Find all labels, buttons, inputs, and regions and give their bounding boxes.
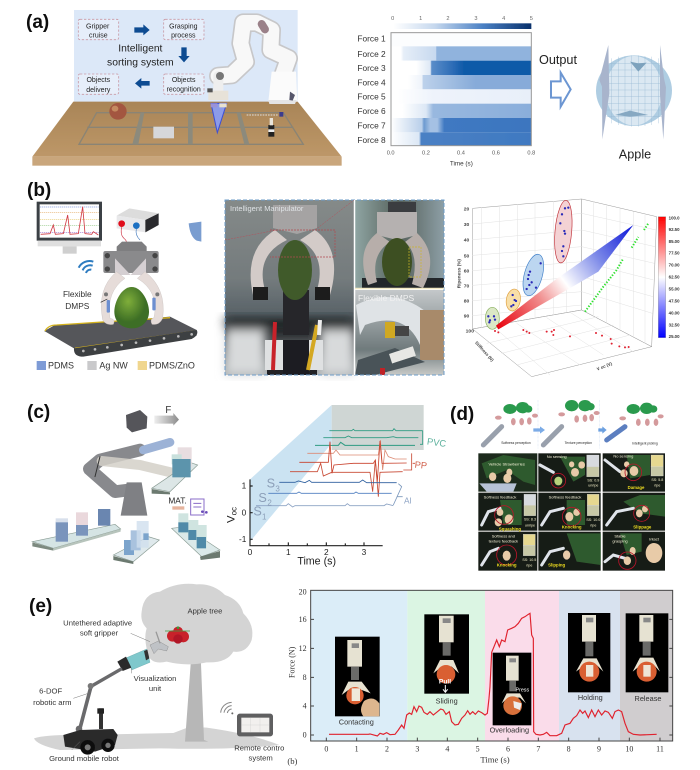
colour bar: 85.00: [669, 239, 680, 244]
S labels: S: [253, 505, 262, 519]
axes: [250, 479, 383, 546]
axis labels: 0: [248, 547, 253, 557]
material legend: [37, 361, 195, 371]
colour bar: 92.50: [669, 227, 680, 232]
time axis: 0.8: [527, 150, 535, 156]
time axis: [387, 150, 535, 167]
labels: Ground mobile robot: [49, 754, 120, 763]
axis numbers: 1: [355, 745, 359, 754]
illustration: intelligent sorting system: Objects: [172, 77, 196, 84]
axis labels: 70: [464, 283, 470, 289]
top strip: strawberry perception: [483, 400, 664, 448]
conveyor right: [172, 513, 220, 560]
mobile robot: [63, 708, 118, 755]
phase labels: Contacting: [339, 718, 374, 727]
conveyor top right: [152, 447, 198, 494]
voltage waterfall chart: [226, 405, 447, 567]
force labels: Force 8: [357, 135, 386, 145]
S labels: S: [267, 477, 275, 491]
apple on table: [109, 103, 127, 120]
labels: Visualization: [134, 674, 176, 683]
illustration: gripper on conveyor: [37, 202, 201, 371]
DMPS label: DMPS: [65, 301, 90, 311]
colour bar: 32.50: [669, 322, 680, 327]
photo captions: No sensing: [547, 454, 567, 459]
heading: (e): (e): [29, 596, 52, 617]
colour scale: 4: [502, 16, 505, 22]
labels: 6-DOF: [39, 686, 62, 695]
photo grid: SS: 5.8: [651, 478, 663, 482]
axis numbers: 2: [385, 745, 389, 754]
PVC label: PVC: [426, 436, 447, 449]
illustration: intelligent sorting system: cruise: [89, 33, 108, 40]
photo captions: grasping: [612, 538, 628, 543]
MAT label and icon: MAT.: [168, 496, 187, 506]
axis labels: -1: [239, 534, 247, 544]
photo caption: Flexible DMPS: [358, 293, 415, 303]
heading: (d): (d): [450, 404, 474, 425]
force labels: Force 2: [357, 49, 386, 59]
photo grid: ripe: [526, 564, 532, 568]
conveyor: [44, 317, 197, 357]
axis labels: 20: [464, 206, 470, 212]
colour bar: 100.0: [669, 215, 680, 220]
photo: intelligent manipulator: [225, 200, 354, 375]
robot arm: [89, 442, 175, 492]
axis numbers: 4: [445, 745, 449, 754]
axis labels: 1: [242, 481, 247, 491]
red circles: [495, 464, 650, 569]
axis labels: [226, 481, 367, 567]
axis labels: oc: [230, 507, 239, 515]
inset: sliding: Pull: [439, 678, 451, 685]
S labels: 2: [267, 499, 272, 508]
time axis: 0.2: [422, 150, 430, 156]
photo captions: Softness feedback: [549, 494, 581, 499]
axis numbers: 20: [299, 587, 307, 596]
colour bar: 40.00: [669, 310, 680, 315]
photo captions: Softness and: [492, 534, 515, 539]
force labels: [357, 34, 386, 145]
AI label: Al: [404, 496, 412, 506]
axis numbers: 8: [303, 673, 307, 682]
colour bar: 77.50: [669, 251, 680, 256]
axis numbers: Force (N): [287, 646, 296, 678]
photo panels: [225, 200, 444, 375]
axis labels: 40: [464, 238, 470, 244]
colour bar: 55.00: [669, 286, 680, 291]
top strip: strawberry perception: Texture perception: [565, 441, 592, 445]
labels: Untethered adaptive: [63, 618, 132, 627]
heading: (b): (b): [27, 180, 51, 201]
phase labels: Holding: [578, 693, 603, 702]
PP traces: [290, 440, 428, 497]
3D apple mesh: [596, 45, 672, 139]
colour bar: 70.00: [669, 263, 680, 268]
time axis: 0.0: [387, 150, 395, 156]
force curve: [329, 613, 657, 736]
axis numbers: 4: [303, 702, 307, 711]
force labels: Force 3: [357, 63, 386, 73]
heading: (c): (c): [27, 402, 50, 423]
time axis: 0.6: [492, 150, 500, 156]
sensor box: [117, 208, 159, 243]
visualization unit: [117, 649, 150, 671]
colour bar: [658, 215, 680, 339]
DMPS label: Flexible: [63, 289, 92, 299]
axis labels: 0: [242, 507, 247, 517]
phase bands: [311, 590, 673, 741]
DMPS label: [63, 289, 107, 311]
apples: [165, 626, 190, 644]
axis numbers: 11: [656, 745, 664, 754]
axis labels: 3: [362, 547, 367, 557]
axis numbers: 0: [324, 745, 328, 754]
shield icon: [189, 222, 201, 242]
photo grid: Squashing: [499, 526, 521, 531]
photo frames: [225, 200, 444, 375]
axis labels: 60: [464, 269, 470, 275]
colour scale: 2: [446, 16, 450, 22]
axis numbers: 6: [506, 745, 510, 754]
avocado: [114, 287, 149, 328]
illustration: intelligent sorting system: Gripper: [86, 23, 110, 30]
panel: d: [450, 400, 665, 571]
colour scale: 5: [530, 16, 533, 22]
panel: a: [26, 10, 342, 166]
photo grid: unripe: [525, 523, 535, 527]
labels: unit: [149, 684, 162, 693]
axis labels: V oc (V): [596, 361, 613, 372]
force cube and arrow: [126, 405, 179, 432]
axis labels: 30: [464, 222, 470, 228]
ripeness ribbon: [496, 225, 633, 329]
photo grid: SS: 8.3: [524, 518, 536, 522]
PVC traces: [315, 429, 447, 449]
leader lines: [72, 633, 150, 750]
colour scale: 3: [474, 16, 478, 22]
robot arm: [76, 669, 121, 732]
axis labels: Ripeness (%): [457, 259, 462, 288]
force vs time chart: [287, 587, 673, 766]
photo grid: SS: 10.0: [586, 518, 600, 522]
top strip: strawberry perception: Softness perception: [501, 441, 531, 445]
axis labels: V: [226, 515, 238, 523]
apple label: Apple: [619, 148, 651, 162]
labels: Apple tree: [188, 607, 222, 616]
force labels: Force 7: [357, 120, 386, 130]
wireless icon: [79, 261, 93, 273]
photo: flexible DMPS: [355, 290, 444, 375]
colour bar: 62.50: [669, 275, 680, 280]
axis numbers: 0: [303, 731, 307, 740]
illustration: intelligent sorting system: [32, 10, 342, 166]
inset: overloading: [493, 653, 531, 725]
axis numbers: 7: [536, 745, 540, 754]
force labels: Force 5: [357, 92, 386, 102]
remote control: [237, 714, 273, 736]
colour scale: 0: [391, 16, 394, 22]
axis numbers: 12: [299, 644, 307, 653]
axis labels: 50: [464, 253, 470, 259]
photo caption: Intelligent Manipulator: [230, 204, 304, 213]
axis labels: [457, 206, 613, 372]
output label: Output: [539, 53, 577, 67]
inset: contacting: [335, 637, 380, 716]
AI traces: [256, 480, 412, 507]
colour bar: 47.50: [669, 298, 680, 303]
S labels: 1: [262, 512, 267, 521]
MAT label and icon: [168, 496, 208, 515]
material legend: Ag NW: [99, 361, 128, 371]
inset: overloading: Press: [516, 687, 529, 693]
axis numbers: 9: [597, 745, 601, 754]
gripper: [101, 242, 163, 325]
time axis: 0.4: [457, 150, 465, 156]
labels: soft gripper: [80, 628, 119, 637]
phase labels: Sliding: [436, 696, 458, 705]
inset: sliding: [424, 614, 469, 694]
tree and ground: [34, 584, 279, 750]
3D scatter plot: [457, 199, 680, 377]
plot box grid: [473, 199, 657, 377]
soft gripper: [150, 632, 168, 654]
photo captions: No sensing: [613, 454, 633, 459]
labels: Remote contro: [234, 743, 284, 752]
sensor insets: [523, 455, 663, 556]
photo grid: Slipping: [548, 563, 566, 568]
axis numbers: 8: [567, 745, 571, 754]
labels: [33, 607, 284, 763]
green projection: [585, 223, 648, 312]
panel: c: [27, 402, 447, 567]
illustration: intelligent sorting system: Intelligent: [118, 43, 163, 54]
subfigure mark: (b): [287, 756, 298, 766]
axis labels: Stiffness (N): [474, 340, 495, 363]
photo grid: Knocking: [497, 563, 517, 568]
inset: holding: [568, 613, 610, 692]
phase labels: [339, 693, 661, 735]
colour scale: [391, 16, 533, 29]
photo grid: ripe: [590, 523, 596, 527]
axis labels: Time (s): [297, 555, 336, 567]
panel: e: [29, 584, 673, 766]
time axis: Time (s): [450, 160, 473, 167]
monitor: [37, 202, 102, 254]
robot arm: [218, 23, 289, 90]
photo captions: [484, 454, 660, 543]
photo grid: Knocking: [562, 525, 582, 530]
illustration: intelligent sorting system: delivery: [86, 87, 111, 94]
inset: release: [626, 613, 668, 692]
photo: gripper close-up: [355, 200, 444, 288]
wireless icon: [221, 702, 233, 714]
photo captions: texture feedback: [489, 538, 518, 543]
illustration: intelligent sorting system: Grasping: [169, 23, 198, 30]
red projection: [494, 329, 630, 348]
panel: b: [27, 180, 680, 377]
axes frame: [311, 590, 673, 741]
S labels: [253, 477, 280, 521]
material legend: PDMS/ZnO: [149, 361, 195, 371]
axis numbers: 16: [299, 615, 307, 624]
photo captions: Softness feedback: [484, 494, 516, 499]
axis labels: 80: [464, 299, 470, 305]
heatmap cells: [391, 33, 531, 146]
PP label: PP: [414, 460, 428, 471]
illustration: intelligent sorting system: sorting system: [107, 57, 174, 68]
S labels: 3: [275, 485, 280, 494]
photo grid: unripe: [588, 484, 598, 488]
force labels: Force 4: [357, 77, 386, 87]
illustration: intelligent sorting system: recognition: [167, 86, 201, 93]
photo captions: Vehicle Strawberries: [489, 461, 525, 466]
axis labels: 90: [464, 314, 470, 320]
phase labels: Release: [635, 694, 661, 703]
output arrow: [551, 73, 571, 107]
force labels: Force 1: [357, 34, 386, 44]
force cube and arrow: F: [165, 405, 171, 416]
flow arrows: [134, 24, 190, 89]
process boxes: [78, 19, 204, 94]
axis labels: 1: [286, 547, 291, 557]
heading: (a): (a): [26, 12, 49, 33]
illustration: apple picking robot: [33, 584, 284, 763]
labels: robotic arm: [33, 698, 71, 707]
labels: system: [249, 753, 273, 762]
ripeness clusters: [485, 200, 574, 329]
axis numbers: Time (s): [480, 755, 510, 765]
S labels: S: [258, 491, 267, 505]
top strip: strawberry perception: Intelligent picking: [632, 441, 658, 445]
illustration: intelligent sorting system: process: [171, 33, 196, 40]
material legend: PDMS: [48, 361, 74, 371]
photo captions: Stable: [614, 534, 626, 539]
axis labels: 100: [466, 329, 474, 335]
photo grid: Damage: [628, 485, 645, 490]
illustration: intelligent sorting system: Objects: [86, 77, 111, 84]
background planes: [250, 405, 424, 542]
axis numbers: 5: [476, 745, 480, 754]
photo grid: SS: 10.5: [522, 558, 536, 562]
conveyor left: [32, 509, 121, 551]
photo captions: Intact: [649, 536, 660, 541]
phase labels: Overloading: [490, 726, 529, 735]
conveyor middle: [113, 521, 159, 564]
axis numbers: 10: [625, 745, 633, 754]
colour scale: 1: [419, 16, 422, 22]
axis numbers: 3: [415, 745, 419, 754]
axis numbers: [287, 587, 664, 765]
photo grid: [478, 453, 665, 571]
force labels: Force 6: [357, 106, 386, 116]
axis labels: 2: [324, 547, 329, 557]
photo grid: SS: 0.9: [587, 479, 599, 483]
colour bar: 25.00: [669, 334, 680, 339]
photo grid: ripe: [654, 483, 660, 487]
illustration: robot arm with conveyors: [32, 405, 220, 564]
photo grid: Slippage: [633, 525, 652, 530]
panel: a heatmap: [357, 16, 672, 167]
